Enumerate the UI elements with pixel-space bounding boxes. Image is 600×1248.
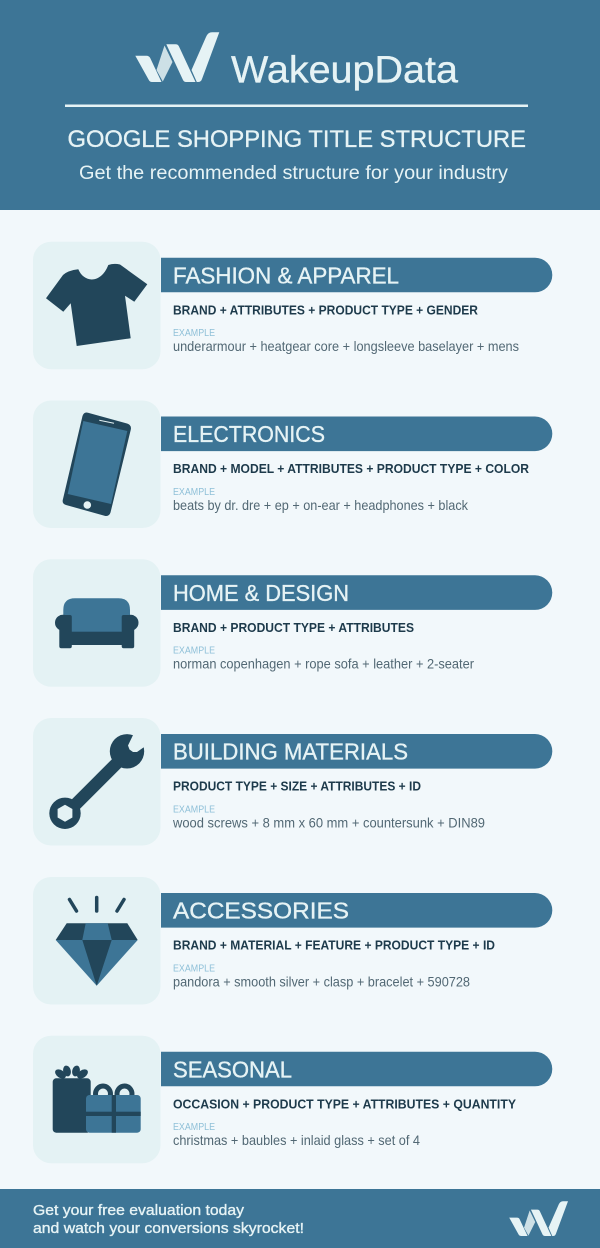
structure: BRAND + MATERIAL + FEATURE + PRODUCT TYPE + ID (173, 938, 495, 953)
banner (161, 416, 552, 451)
call to action: and watch your conversions skyrocket! (33, 1220, 304, 1237)
panel: building materials (33, 718, 552, 846)
footer logo (509, 1201, 568, 1236)
icon: sofa (55, 598, 138, 648)
panel: fashion and apparel (33, 242, 552, 369)
structure: BRAND + MODEL + ATTRIBUTES + PRODUCT TYPE + COLOR (173, 461, 530, 476)
icon: t-shirt (46, 264, 147, 346)
panel: home and design (33, 559, 552, 687)
heading: ELECTRONICS (173, 421, 325, 447)
banner (161, 258, 552, 292)
example text: underarmour + heatgear core + longsleeve baselayer + mens (173, 338, 519, 354)
logo (135, 32, 219, 82)
heading: HOME & DESIGN (173, 580, 349, 606)
icon: wrench (49, 733, 147, 829)
example label: EXAMPLE (173, 804, 215, 815)
panel: electronics (33, 400, 552, 528)
structure: PRODUCT TYPE + SIZE + ATTRIBUTES + ID (173, 779, 421, 794)
heading: ACCESSORIES (173, 898, 349, 924)
call to action: Get your free evaluation today (33, 1202, 245, 1219)
heading: SEASONAL (173, 1056, 292, 1082)
footer panel (0, 1189, 600, 1248)
example text: pandora + smooth silver + clasp + bracelet + 590728 (173, 973, 470, 989)
structure: OCCASION + PRODUCT TYPE + ATTRIBUTES + QUANTITY (173, 1096, 516, 1111)
example text: wood screws + 8 mm x 60 mm + countersunk + DIN89 (172, 814, 485, 830)
example label: EXAMPLE (173, 963, 215, 974)
icon: gift boxes (53, 1065, 141, 1133)
structure: BRAND + ATTRIBUTES + PRODUCT TYPE + GENDER (173, 302, 479, 317)
header panel (0, 0, 600, 210)
subtitle: Get the recommended structure for your industry (79, 163, 509, 184)
panel: accessories (33, 877, 552, 1004)
call to action (33, 1202, 304, 1237)
icon: diamond (56, 898, 138, 986)
structure: BRAND + PRODUCT TYPE + ATTRIBUTES (173, 620, 414, 635)
example text: christmas + baubles + inlaid glass + set of 4 (173, 1132, 420, 1148)
heading: FASHION & APPAREL (173, 262, 399, 288)
example label: EXAMPLE (173, 328, 215, 339)
example label: EXAMPLE (173, 646, 215, 657)
example label: EXAMPLE (173, 487, 215, 498)
example label: EXAMPLE (173, 1122, 215, 1133)
example text: beats by dr. dre + ep + on-ear + headphones + black (173, 497, 469, 513)
icon: smartphone (63, 412, 131, 516)
panel: seasonal (33, 1036, 552, 1163)
banner (161, 734, 552, 769)
banner (161, 575, 552, 610)
title: GOOGLE SHOPPING TITLE STRUCTURE (68, 126, 526, 153)
example text: norman copenhagen + rope sofa + leather + 2-seater (173, 656, 474, 672)
heading: BUILDING MATERIALS (173, 739, 408, 765)
brand name: WakeupData (231, 50, 459, 92)
banner (161, 1052, 552, 1086)
banner (161, 893, 552, 928)
